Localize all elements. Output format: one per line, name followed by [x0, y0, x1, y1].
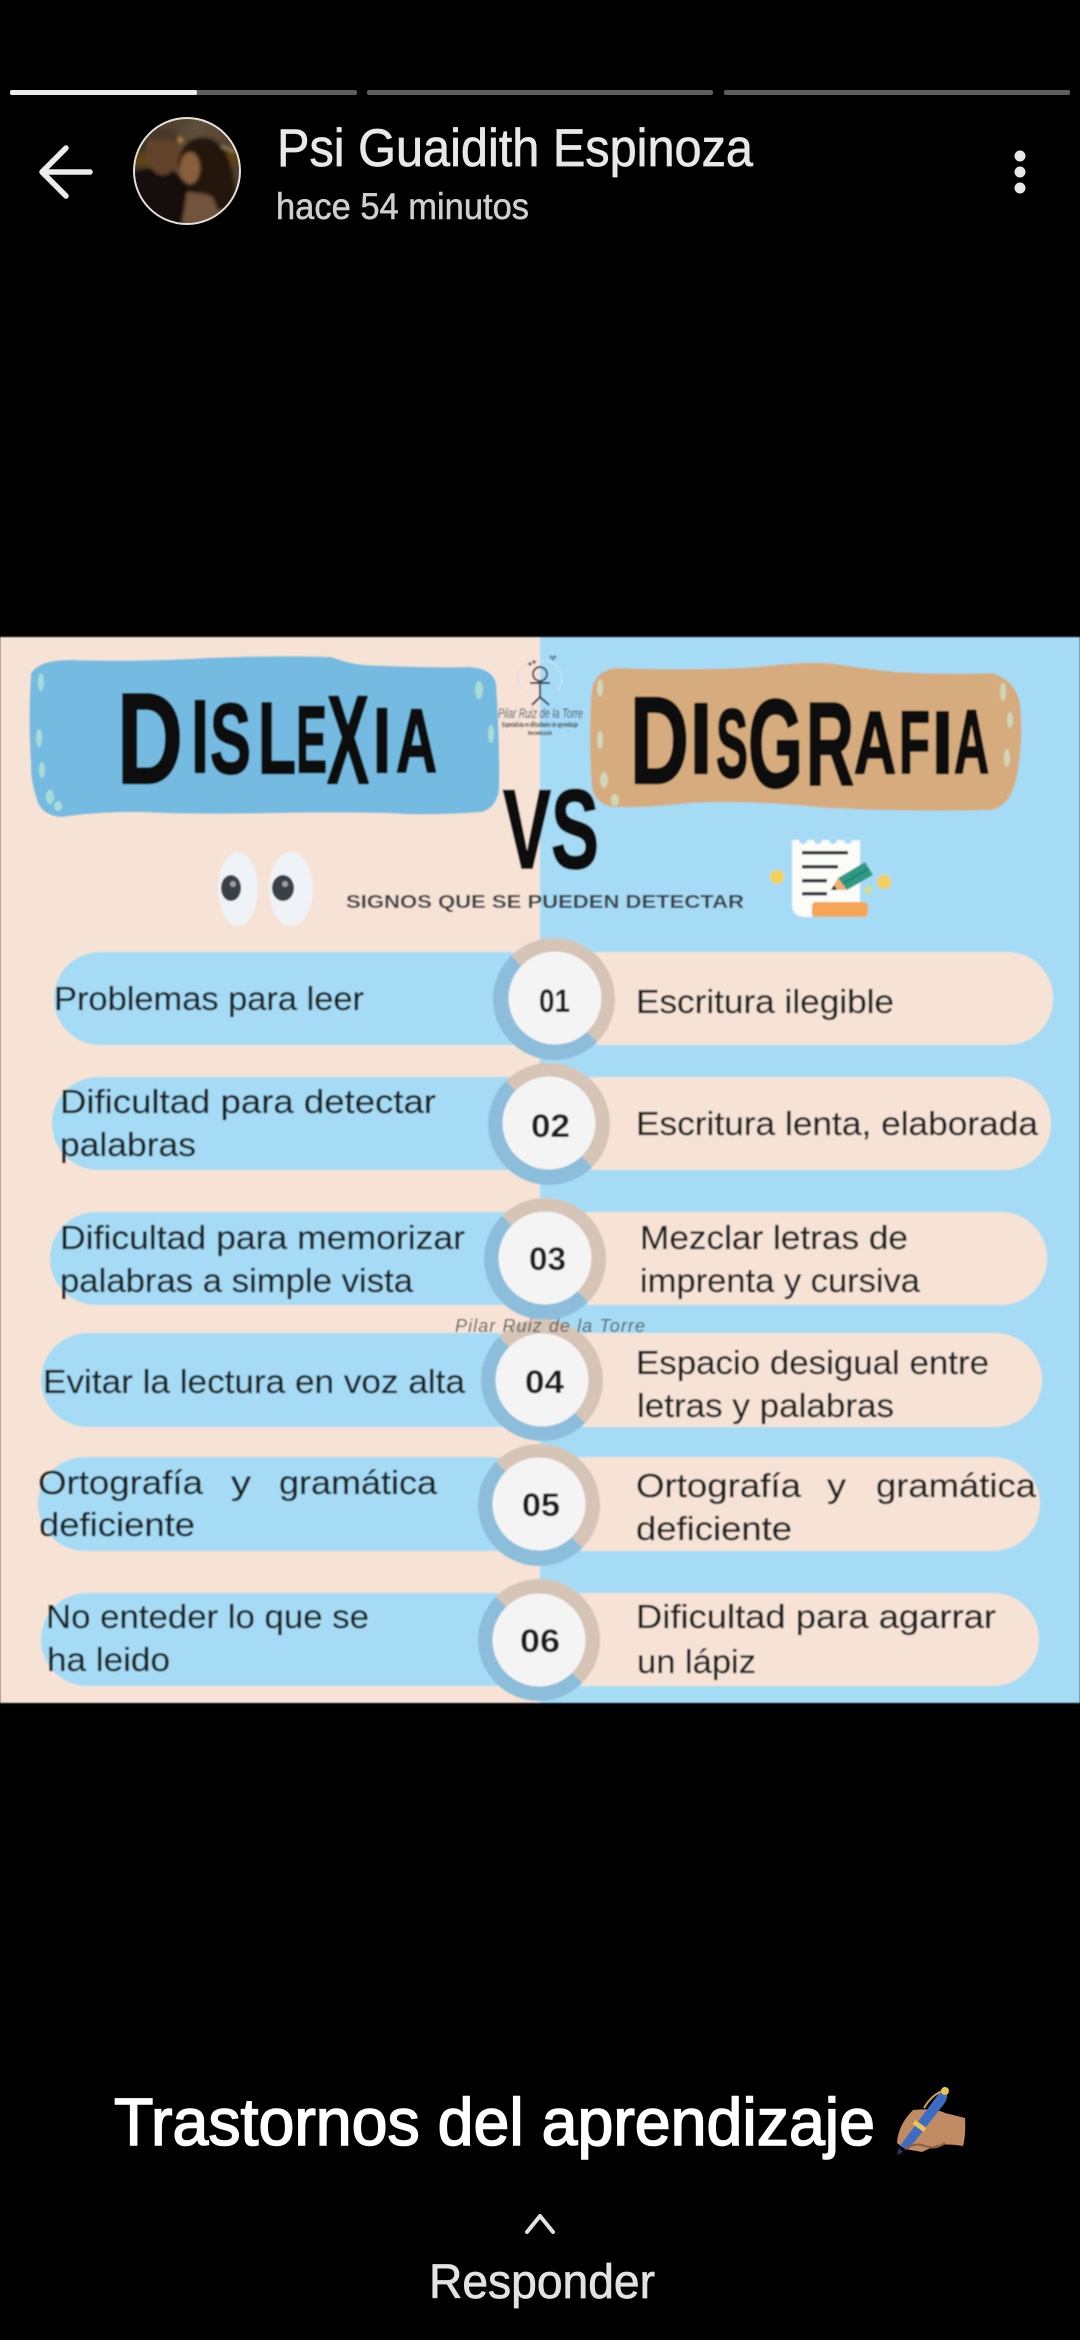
row 03 dislexia sign: Dificultad para memorizar: [60, 1219, 465, 1256]
heading: DISGRAFIA: S: [716, 689, 748, 798]
row 06: [41, 1579, 1039, 1701]
row 03 disgrafia sign: Mezclar letras de: [640, 1219, 908, 1256]
reply label: Responder: [429, 2256, 655, 2309]
heading: DISLEXIA: D: [117, 667, 183, 811]
heading: DISGRAFIA: D: [630, 673, 689, 810]
row 06 dislexia sign: No enteder lo que se: [46, 1598, 369, 1635]
row 05 dislexia sign: Ortografía: [38, 1464, 204, 1501]
heading: DISLEXIA: E: [296, 687, 327, 793]
row 05: [38, 1444, 1040, 1566]
row 03 number: 03: [529, 1241, 566, 1277]
story caption: Trastornos del aprendizaje: [114, 2085, 875, 2160]
row 03 dislexia sign: palabras a simple vista: [60, 1262, 414, 1299]
row 04 number: 04: [525, 1364, 564, 1400]
right blue background: [540, 637, 1080, 1703]
row 05 disgrafia sign: Ortografía: [636, 1467, 802, 1504]
row 05 dislexia sign: gramática: [279, 1464, 438, 1501]
row 04 disgrafia sign: [636, 1344, 989, 1424]
heading: DISLEXIA: L: [258, 683, 296, 795]
heading: DISLEXIA: X: [327, 671, 369, 810]
row 05 disgrafia sign: y: [827, 1467, 847, 1504]
icon: notepad and pencil: [770, 836, 891, 917]
row 01 disgrafia sign: Escritura ilegible: [636, 983, 894, 1020]
row 03 disgrafia sign: [640, 1219, 921, 1299]
row 06 disgrafia sign: [636, 1598, 996, 1680]
heading: DISGRAFIA: G: [748, 675, 803, 814]
row 04 disgrafia sign: letras y palabras: [637, 1387, 894, 1424]
avatar photo: [133, 117, 241, 225]
watermark signature: Pilar Ruiz de la Torre: [455, 1316, 645, 1336]
heading: DISGRAFIA: R: [806, 679, 854, 811]
row 02 dislexia sign: [60, 1083, 436, 1163]
heading: VS: VS: [503, 767, 599, 892]
timestamp: hace 54 minutos: [276, 186, 529, 227]
story progress bars: [10, 90, 1070, 95]
heading: DISLEXIA: [117, 667, 437, 811]
row 02 dislexia sign: Dificultad para detectar: [60, 1083, 436, 1120]
heading blob: dislexia: [30, 656, 499, 817]
account name: Psi Guaidith Espinoza: [277, 119, 753, 178]
row 05 dislexia sign: deficiente: [39, 1506, 195, 1543]
heading: DISLEXIA: S: [210, 683, 251, 794]
row 01: [54, 938, 1053, 1060]
heading: DISLEXIA: A: [396, 692, 437, 792]
logo: stick figure with signature: Pilar Ruiz de la Torre: [498, 705, 583, 721]
row 03 disgrafia sign: imprenta y cursiva: [640, 1262, 921, 1299]
icon: back arrow: [42, 148, 90, 196]
row 03: [50, 1198, 1047, 1320]
heading: DISGRAFIA: A: [854, 693, 896, 792]
logo: stick figure with signature: Especialista en dificultades de aprendizaje: [502, 722, 578, 729]
heading: DISLEXIA: I: [191, 679, 209, 794]
heading: DISGRAFIA: F: [899, 693, 930, 792]
heading: DISLEXIA: I: [373, 690, 391, 792]
heading: DISGRAFIA: I: [690, 683, 712, 795]
row 06 disgrafia sign: un lápiz: [637, 1643, 756, 1680]
row 06 number: 06: [520, 1623, 560, 1659]
heading: DISGRAFIA: A: [954, 693, 989, 793]
row 02 disgrafia sign: Escritura lenta, elaborada: [636, 1105, 1039, 1142]
row 02 number: 02: [531, 1108, 570, 1144]
logo: stick figure with signature: [498, 655, 583, 737]
icon: eyes: [218, 852, 313, 926]
subtitle: SIGNOS QUE SE PUEDEN DETECTAR: [346, 892, 744, 912]
row 06 dislexia sign: ha leido: [47, 1641, 170, 1678]
heading: DISGRAFIA: I: [932, 693, 953, 792]
icon: more options dots: [1014, 150, 1026, 194]
row 05 disgrafia sign: deficiente: [636, 1510, 792, 1547]
logo: stick figure with signature: Neuroeducación: [528, 731, 552, 737]
row 02: [52, 1063, 1051, 1185]
icon: writing hand emoji: [897, 2087, 965, 2155]
row 03 dislexia sign: [60, 1219, 465, 1299]
row 05 disgrafia sign: gramática: [876, 1467, 1037, 1504]
icon: swipe up chevron: [527, 2216, 553, 2232]
row 05 dislexia sign: [38, 1464, 438, 1543]
row 05 dislexia sign: y: [231, 1464, 252, 1501]
row 02 dislexia sign: palabras: [60, 1126, 196, 1163]
heading blob: disgrafia: [590, 663, 1021, 814]
left peach background: [0, 637, 540, 1703]
row 05 number: 05: [522, 1487, 560, 1523]
row 06 disgrafia sign: Dificultad para agarrar: [636, 1598, 996, 1635]
row 05 disgrafia sign: [636, 1467, 1037, 1547]
row 01 dislexia sign: Problemas para leer: [54, 980, 364, 1017]
row 06 dislexia sign: [46, 1598, 369, 1678]
infographic panel: [0, 637, 1080, 1703]
row 04 dislexia sign: Evitar la lectura en voz alta: [43, 1363, 466, 1400]
heading: DISGRAFIA: [630, 673, 989, 814]
row 01 number: 01: [539, 983, 570, 1019]
row 04 disgrafia sign: Espacio desigual entre: [636, 1344, 989, 1381]
row 04: [41, 1319, 1042, 1441]
